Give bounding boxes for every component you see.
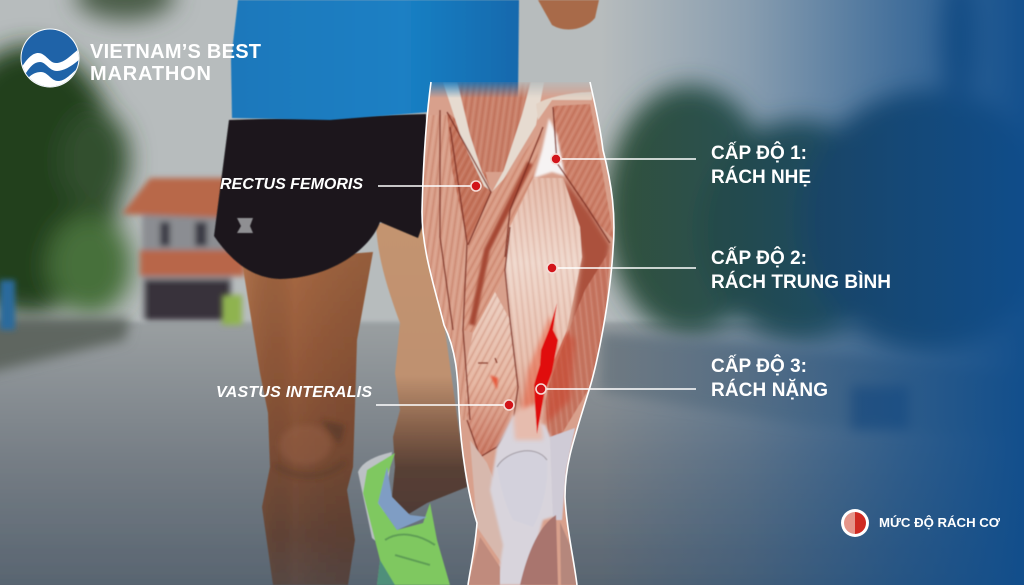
distant figures bbox=[0, 280, 242, 330]
shirt bbox=[231, 0, 519, 120]
blue overlay bbox=[600, 0, 1024, 585]
dark right band bbox=[563, 177, 610, 340]
callout: level 3: RÁCH NẶNG bbox=[711, 379, 828, 401]
temple building bbox=[122, 178, 245, 320]
pink tendon blend bbox=[513, 405, 543, 440]
muscle base bbox=[428, 82, 614, 585]
callout: level 2 bbox=[547, 247, 891, 293]
right outer muscle bbox=[545, 250, 610, 437]
knee shading bbox=[275, 420, 345, 476]
front leg bbox=[242, 252, 373, 585]
legend: muscle tear level bbox=[841, 509, 1001, 537]
red flush beside tear bbox=[545, 320, 575, 425]
left trees bbox=[0, 0, 175, 315]
white upper tendon bbox=[534, 118, 565, 178]
callout: level 2: CẤP ĐỘ 2: bbox=[711, 247, 807, 269]
hip band bbox=[536, 92, 592, 120]
patella bbox=[497, 451, 547, 527]
pelvic centre muscle bbox=[458, 82, 530, 172]
leg outline bbox=[422, 82, 614, 585]
outer-left muscle bbox=[424, 115, 466, 420]
callout: Vastus Interalis: VASTUS INTERALIS bbox=[216, 384, 372, 401]
logo: Vietnam's Best Marathon bbox=[20, 28, 261, 90]
callout: level 1: RÁCH NHẸ bbox=[711, 166, 811, 188]
low wall left bbox=[0, 318, 130, 375]
lower muscles bbox=[520, 515, 558, 585]
shorts brand mark bbox=[237, 218, 253, 233]
callout: level 3: CẤP ĐỘ 3: bbox=[711, 355, 807, 377]
callout: level 1 bbox=[551, 142, 811, 188]
minor tear marks bbox=[478, 358, 498, 390]
running shoe bbox=[358, 452, 450, 585]
callout: Rectus Femoris bbox=[220, 176, 481, 193]
anatomy: thigh muscles bbox=[421, 82, 615, 585]
sartorius diagonal bbox=[463, 127, 543, 333]
right knee band bbox=[550, 428, 575, 520]
sartorius dark strip bbox=[472, 163, 530, 325]
tear injury bbox=[522, 303, 558, 434]
tendon bands bbox=[443, 82, 544, 192]
knee side bbox=[470, 440, 504, 562]
callout: level 1: CẤP ĐỘ 1: bbox=[711, 142, 807, 164]
callout: level 3 bbox=[536, 355, 828, 401]
runner bbox=[214, 0, 599, 585]
central rectus muscle bbox=[505, 178, 582, 420]
shorts bbox=[214, 114, 430, 279]
callout: Rectus Femoris: RECTUS FEMORIS bbox=[220, 176, 363, 193]
callout: Vastus Interalis bbox=[216, 384, 514, 410]
callout: level 2: RÁCH TRUNG BÌNH bbox=[711, 271, 891, 293]
vastus medialis bbox=[465, 292, 518, 457]
muscle separation lines bbox=[440, 107, 610, 457]
back leg bbox=[376, 205, 467, 515]
patella edge bbox=[497, 451, 547, 467]
roadside railing bbox=[600, 332, 1024, 440]
logo: Vietnam's Best Marathon: VIETNAM’S BEST bbox=[90, 41, 261, 63]
adductor muscle bbox=[447, 112, 491, 245]
logo: Vietnam's Best Marathon: MARATHON bbox=[90, 63, 211, 85]
legend: muscle tear level: MỨC ĐỘ RÁCH CƠ bbox=[879, 515, 1001, 530]
knee tendon bbox=[490, 415, 560, 585]
tensor muscle bbox=[553, 104, 614, 240]
right trees bbox=[605, 0, 1024, 350]
hand bbox=[538, 0, 599, 29]
